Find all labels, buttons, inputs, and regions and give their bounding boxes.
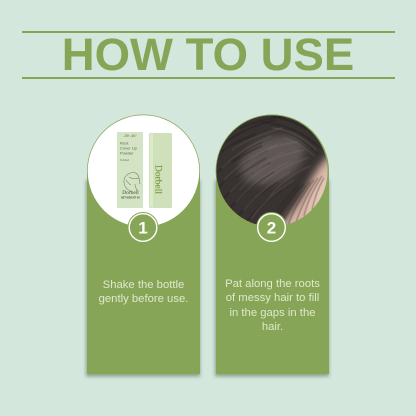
step 2 text — [225, 278, 320, 333]
step 1 text: Shake the bottle — [103, 279, 184, 291]
product: box: -39·-45· — [123, 134, 137, 138]
panel 1 white circle — [88, 115, 199, 227]
step 2 text: in the gaps in the — [229, 307, 316, 319]
title rule top — [22, 31, 395, 33]
step 2 text: Pat along the roots — [225, 278, 320, 290]
product: box: NET WEIGHT 4G — [121, 196, 140, 200]
badge 2 — [256, 212, 287, 243]
product: box — [117, 132, 143, 208]
panel 2 green body — [216, 114, 329, 374]
product: box: Powder — [120, 150, 134, 156]
product: box: Dorbell — [122, 190, 139, 196]
hair strands — [216, 116, 326, 228]
panel: step 2 — [214, 113, 335, 376]
hair photo outline — [216, 115, 328, 227]
product: box: Root — [120, 140, 129, 146]
title: HOW TO USE — [62, 29, 354, 80]
badge 2: 2 — [267, 218, 276, 238]
step 2 text: of messy hair to fill — [226, 292, 319, 304]
title rule bottom — [22, 77, 395, 79]
product: box: Cover Up — [120, 146, 138, 150]
product: stick — [149, 133, 172, 208]
panel: step 1 — [86, 114, 200, 376]
step 2 text: hair. — [262, 321, 283, 333]
step 1 text: gently before use. — [99, 293, 188, 305]
product: box: 0.14oz — [120, 158, 130, 162]
badge 1: 1 — [138, 218, 148, 238]
panel 1 green body — [87, 114, 200, 374]
hair photo — [216, 115, 328, 224]
badge 1 — [128, 212, 158, 243]
product: stick: Dorbell — [152, 165, 162, 194]
step 1 text — [99, 279, 188, 305]
